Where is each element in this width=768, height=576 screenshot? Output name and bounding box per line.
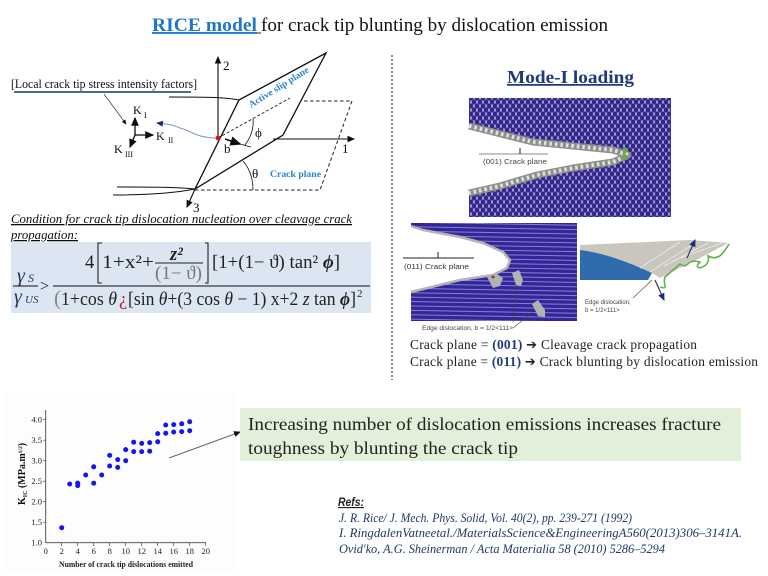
icon: K axes: [114, 103, 174, 159]
x tick labels: 4: [76, 546, 81, 556]
numerator: [1+(1− ϑ) tan² ϕ]: [212, 253, 340, 273]
icon: K axes: I: [144, 111, 147, 120]
equation panel: [11, 242, 371, 313]
label: edge dislocation: Edge dislocation, b = 1/2<111>: [422, 326, 514, 332]
denominator: [54, 286, 362, 310]
y tick labels: 1.5: [31, 517, 42, 527]
heading: Mode-I loading: Mode-I loading: [507, 67, 634, 87]
x tick labels: 18: [185, 546, 194, 556]
icon: K axes: II: [168, 136, 174, 145]
vector b and angles: ϕ: [255, 125, 262, 140]
label: 011 crack plane: [403, 252, 474, 271]
crack plane summary: Crack plane = (001) ➔ Cleavage crack propagation: [410, 337, 697, 353]
numerator: (1− ϑ): [155, 264, 202, 284]
callout: Increasing number of dislocation emissions increases fracture: [248, 414, 721, 434]
scatter chart: [4, 392, 236, 572]
x tick labels: 10: [121, 546, 130, 556]
y tick labels: 4.0: [31, 414, 42, 424]
arrow: crack tip to K axes: [157, 123, 218, 138]
left fraction: S: [28, 271, 34, 285]
Burgers vectors: [687, 240, 695, 258]
crack plane summary: Crack plane = (011) ➔ Crack blunting by dislocation emission: [410, 354, 758, 370]
label: local crack tip stress intensity factors: [Local crack tip stress intensity factors]: [11, 76, 197, 91]
denominator: ¿: [119, 290, 127, 310]
y tick labels: [31, 414, 42, 548]
scatter chart: ): [17, 443, 28, 446]
dislocation clusters: [487, 270, 545, 317]
axes 1 2 3: 3: [193, 200, 200, 215]
crack plane: Crack plane: [270, 170, 321, 180]
callout: [240, 408, 741, 461]
numerator: [85, 243, 340, 284]
label: edge dislocation: [585, 280, 652, 314]
crack plane: [195, 101, 352, 190]
data points: [59, 419, 192, 530]
vector b and angles: θ: [252, 166, 258, 181]
denominator: (: [54, 286, 61, 310]
references: I. RingdalenVatneetal./MaterialsScience&EngineeringA560(2013)306–3141A.: [338, 526, 742, 540]
image: 001 crack atomistic: [469, 98, 671, 217]
y tick labels: 1.0: [31, 538, 42, 548]
scatter chart: IC: [23, 491, 29, 497]
references: [338, 497, 742, 556]
label: 011 crack plane: (011) Crack plane: [404, 262, 469, 271]
label: 001 crack plane: [479, 148, 548, 166]
left fraction: US: [25, 294, 39, 306]
scatter chart: 1/2: [18, 446, 24, 453]
references: Ovid'ko, A.G. Sheinerman / Acta Materialia 58 (2010) 5286–5294: [339, 542, 666, 556]
left fraction: >: [40, 278, 49, 295]
x tick labels: 12: [137, 546, 146, 556]
left fraction: γ: [17, 265, 26, 287]
axis titles: Number of crack tip dislocations emitted: [59, 560, 194, 569]
icon: K axes: K: [133, 103, 142, 117]
denominator: 1+cos θ: [61, 290, 117, 310]
icon: K axes: III: [125, 150, 133, 159]
crack plane summary: [410, 337, 758, 370]
label: local crack tip stress intensity factors: [11, 76, 197, 124]
green dislocation loops: [660, 244, 729, 288]
x tick labels: 20: [201, 546, 210, 556]
crack tip dot: [216, 136, 220, 140]
x tick labels: 0: [44, 546, 48, 556]
vector b and angles: [224, 119, 262, 190]
scatter chart: (MPa.m: [17, 453, 28, 491]
denominator: 2: [357, 288, 362, 300]
axes: [46, 410, 206, 543]
callout: toughness by blunting the crack tip: [248, 438, 518, 458]
numerator: 1+x²+: [102, 253, 154, 273]
vector b and angles: b: [224, 141, 230, 156]
condition text: Condition for crack tip dislocation nucleation over cleavage crack: [11, 211, 352, 226]
label: edge dislocation: [422, 285, 533, 332]
condition text: [10, 211, 352, 242]
y tick labels: 2.5: [31, 476, 42, 486]
crack faces: [169, 97, 239, 100]
arrow: chart to callout: [169, 432, 240, 458]
slip plane: [195, 53, 326, 189]
denominator: [sin θ+(3 cos θ − 1) x+2 z tan ϕ]: [128, 290, 356, 310]
image: 011 crack atomistic: [403, 223, 577, 332]
x tick labels: 2: [60, 546, 64, 556]
label: edge dislocation: Edge dislocation,: [585, 300, 631, 306]
x tick labels: 6: [92, 546, 96, 556]
numerator: 4: [85, 253, 94, 273]
icon: K axes: K: [114, 142, 123, 156]
label: edge dislocation: b = 1/2<111>: [585, 308, 620, 314]
axes 1 2 3: 2: [223, 58, 230, 73]
left fraction: [13, 265, 49, 308]
slip plane: Active slip plane: [247, 65, 311, 111]
icon: K axes: K: [156, 129, 165, 143]
axes 1 2 3: [187, 57, 354, 215]
label: 001 crack plane: (001) Crack plane: [483, 157, 547, 166]
x tick labels: 16: [169, 546, 178, 556]
y tick labels: 2.0: [31, 496, 42, 506]
image: 3D dislocation lines: [580, 240, 729, 314]
x tick labels: [44, 546, 210, 556]
x tick labels: 8: [108, 546, 112, 556]
x tick labels: 14: [153, 546, 163, 556]
title: for crack tip blunting by dislocation emission: [261, 16, 608, 36]
scatter chart: K: [17, 497, 28, 505]
y tick labels: 3.0: [31, 456, 42, 466]
left fraction: γ: [14, 286, 23, 308]
y tick labels: 3.5: [31, 435, 42, 445]
references: J. R. Rice/ J. Mech. Phys. Solid, Vol. 40(2), pp. 239-271 (1992): [339, 511, 632, 525]
panel divider: [391, 55, 393, 380]
panel: Rice crack tip diagram: [11, 53, 354, 215]
condition text: propagation:: [10, 227, 78, 242]
title: RICE model: [152, 16, 257, 36]
references: Refs:: [338, 497, 364, 509]
numerator: z²: [169, 245, 183, 265]
axes 1 2 3: 1: [342, 141, 348, 156]
